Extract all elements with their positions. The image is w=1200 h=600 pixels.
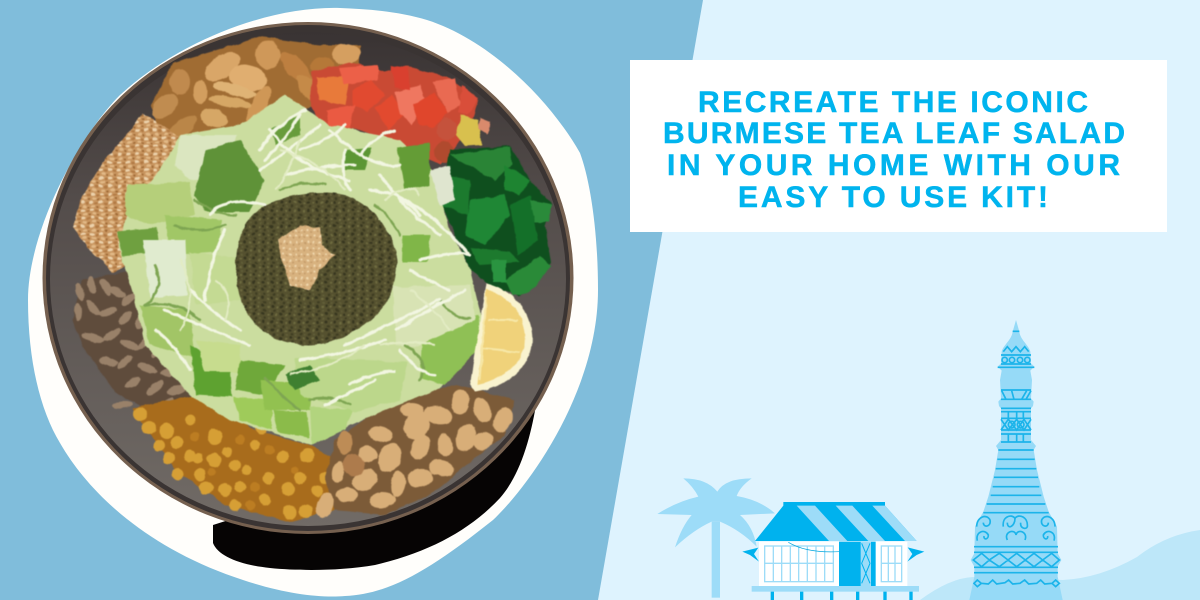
hill <box>920 530 1200 600</box>
headline card <box>630 60 1167 232</box>
icon: palm tree <box>657 478 775 598</box>
headline text: EASY TO USE KIT! <box>738 181 1048 214</box>
headline text: IN YOUR HOME WITH OUR <box>667 149 1120 182</box>
yellow split peas <box>132 395 345 522</box>
lemon wedge <box>470 283 532 392</box>
headline text: RECREATE THE ICONIC <box>698 86 1088 119</box>
icon: stilt house <box>742 502 924 600</box>
lettuce and cabbage <box>117 95 482 445</box>
sunflower seeds <box>72 272 195 413</box>
salad bowl photo <box>42 22 574 570</box>
headline text <box>663 86 1125 214</box>
tomatoes <box>310 62 490 165</box>
background: light blue panel <box>598 0 1200 600</box>
plate <box>42 22 574 534</box>
fermented tea leaf mound <box>236 192 397 345</box>
green peppers <box>440 146 552 296</box>
peanuts <box>313 385 517 520</box>
plate shadow <box>213 405 536 570</box>
fried garlic chips <box>147 37 360 152</box>
food <box>72 37 552 522</box>
headline text: BURMESE TEA LEAF SALAD <box>663 117 1125 150</box>
white cut-out behind plate <box>28 8 598 596</box>
icon: pagoda tower <box>969 320 1063 600</box>
ground peanut topping <box>278 225 335 290</box>
toasted sesame <box>73 113 190 273</box>
